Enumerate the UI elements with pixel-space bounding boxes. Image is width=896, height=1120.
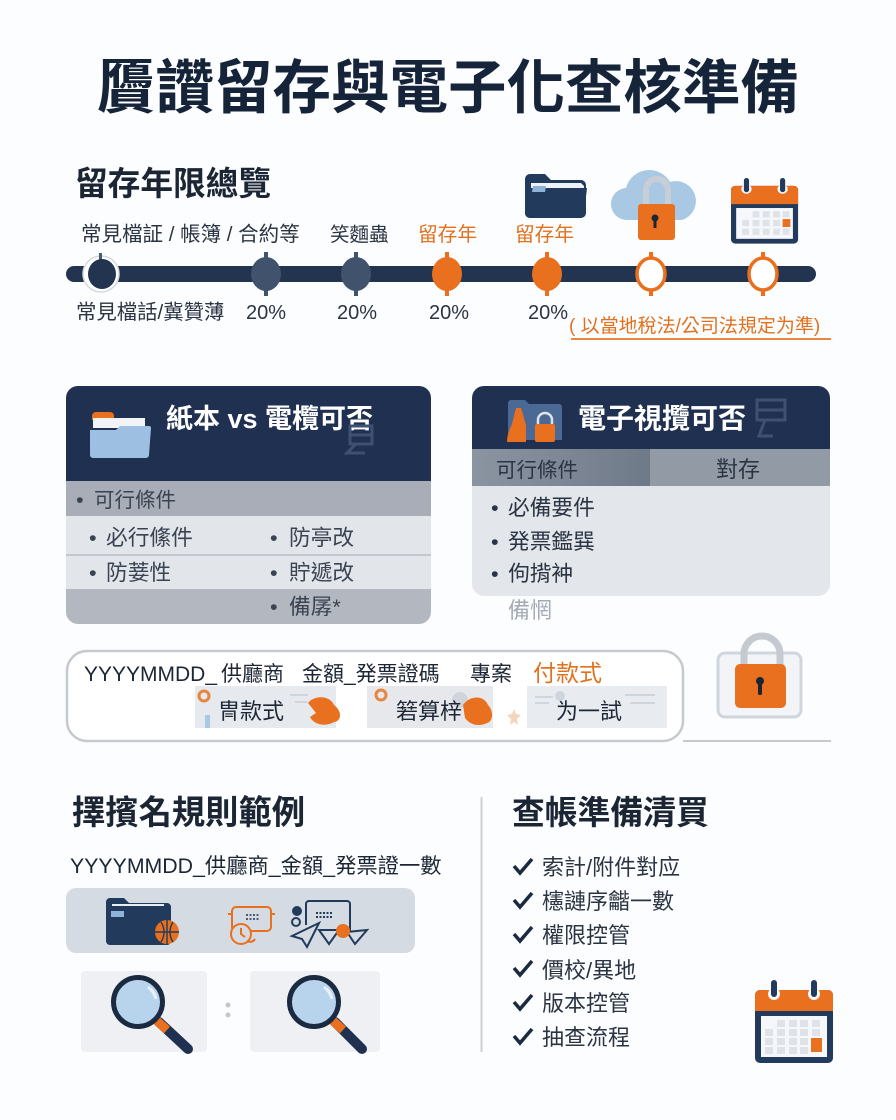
filename pattern: YYYYMMDD_供廳商_金額_発票證一數 xyxy=(70,854,442,878)
section: retention timeline xyxy=(66,165,831,340)
panel: search left xyxy=(81,971,207,1052)
icon: calendar xyxy=(755,980,833,1063)
list rows: 必行絛件 xyxy=(106,525,193,550)
section: naming rules xyxy=(66,795,442,1052)
retention note: ( 以當地稅法/公司法規定为準) xyxy=(569,315,820,337)
thumbnail 3 xyxy=(527,686,667,728)
panel heading: 電子視攬可否 xyxy=(578,403,746,434)
icon: folder with globe xyxy=(106,898,179,945)
list rows: 貯遞改 xyxy=(289,560,354,585)
icon: folder with lock xyxy=(507,400,562,442)
checklist: 櫶謰序龤一數 xyxy=(542,889,674,914)
dots xyxy=(246,915,260,919)
panel: search right xyxy=(250,971,380,1052)
top labels: 留存年 xyxy=(418,224,477,246)
checklist: 索計/附件對应 xyxy=(542,855,680,880)
icon: folder xyxy=(525,174,587,218)
timeline nodes xyxy=(83,252,777,296)
icon: faint form xyxy=(347,426,372,453)
icon: outlined workflow xyxy=(292,901,367,947)
filename text: YYYYMMDD_ xyxy=(84,663,217,686)
heading: retention overview: 留存年限總覽 xyxy=(75,165,271,202)
thumbnail 1 xyxy=(195,686,340,728)
icon: cloud lock xyxy=(611,170,696,240)
icon: small star xyxy=(507,709,521,725)
filename text: 金額_発票證碼 xyxy=(302,663,440,686)
checklist: 價校/異地 xyxy=(542,958,636,983)
list rows: • xyxy=(89,525,97,550)
icon: orange clock chat xyxy=(228,907,275,944)
icon: faint form xyxy=(757,400,785,436)
table headers: 可行條件 xyxy=(496,459,578,482)
panel: filename example xyxy=(67,651,831,742)
filename text xyxy=(84,660,602,686)
bottom labels: 20% xyxy=(429,302,469,324)
list rows: • xyxy=(270,594,278,619)
panel: paper vs electronic xyxy=(66,386,431,624)
list rows: • xyxy=(270,560,278,585)
icon: light blue folder xyxy=(90,412,151,458)
thumbnail 1: 冑款式 xyxy=(218,699,284,724)
panel heading: 紙本 vs 電欖可否 xyxy=(166,404,373,434)
checklist: 抽查流程 xyxy=(542,1025,630,1050)
filename text: 付款式 xyxy=(533,660,602,686)
table headers xyxy=(496,457,760,482)
panel: electronic storage xyxy=(472,386,830,623)
list rows: • xyxy=(89,560,97,585)
top labels: 常見檔証 / 帳簿 / 合約等 xyxy=(81,223,300,246)
bottom labels: 20% xyxy=(337,302,377,324)
checklist xyxy=(514,855,680,1050)
list rows xyxy=(76,487,354,619)
table headers: 對存 xyxy=(716,457,760,482)
list rows: 防亭改 xyxy=(289,525,354,550)
list rows: 佝揹衶 xyxy=(508,561,573,586)
list rows: • xyxy=(270,525,278,550)
checklist: 權限控管 xyxy=(542,923,630,948)
heading: 擇擯名規則範例 xyxy=(72,795,305,832)
separator dots xyxy=(226,1002,230,1018)
filename text: 供廳商 xyxy=(221,663,284,686)
list rows: • xyxy=(76,487,84,512)
list rows: 備孱* xyxy=(289,594,341,619)
thumbnail 2: 箬算梓 xyxy=(396,699,462,724)
list rows: • xyxy=(491,495,499,520)
list rows: 必備要件 xyxy=(508,495,595,520)
filename text: 專案 xyxy=(470,663,512,686)
heading: 查帳準備清買 xyxy=(512,794,709,831)
list rows xyxy=(491,495,595,586)
bottom labels xyxy=(76,301,568,324)
icon: large padlock xyxy=(718,636,801,717)
checklist: 版本控管 xyxy=(542,991,630,1016)
top labels: 笑麵蟲 xyxy=(330,224,389,246)
bottom labels: 20% xyxy=(528,302,568,324)
list rows: • xyxy=(491,561,499,586)
list rows: 可行條件 xyxy=(94,489,176,512)
title: 贗讚留存與電子化查核準備 xyxy=(97,56,799,121)
icon: calendar xyxy=(731,178,798,244)
thumbnail 3: 为一試 xyxy=(556,699,622,724)
bottom labels: 常見檔話/冀贊薄 xyxy=(76,301,224,324)
top labels: 留存年 xyxy=(515,224,574,246)
note: 備惘 xyxy=(508,598,552,623)
top labels xyxy=(81,223,574,246)
list rows: 発票鑑巽 xyxy=(508,529,595,554)
icon strip xyxy=(66,888,415,953)
bottom labels: 20% xyxy=(246,302,286,324)
thumbnail 2 xyxy=(367,686,493,728)
timeline bar xyxy=(66,266,816,282)
list rows: 防菨性 xyxy=(106,560,171,585)
section: audit checklist xyxy=(512,794,833,1063)
list rows: • xyxy=(491,529,499,554)
